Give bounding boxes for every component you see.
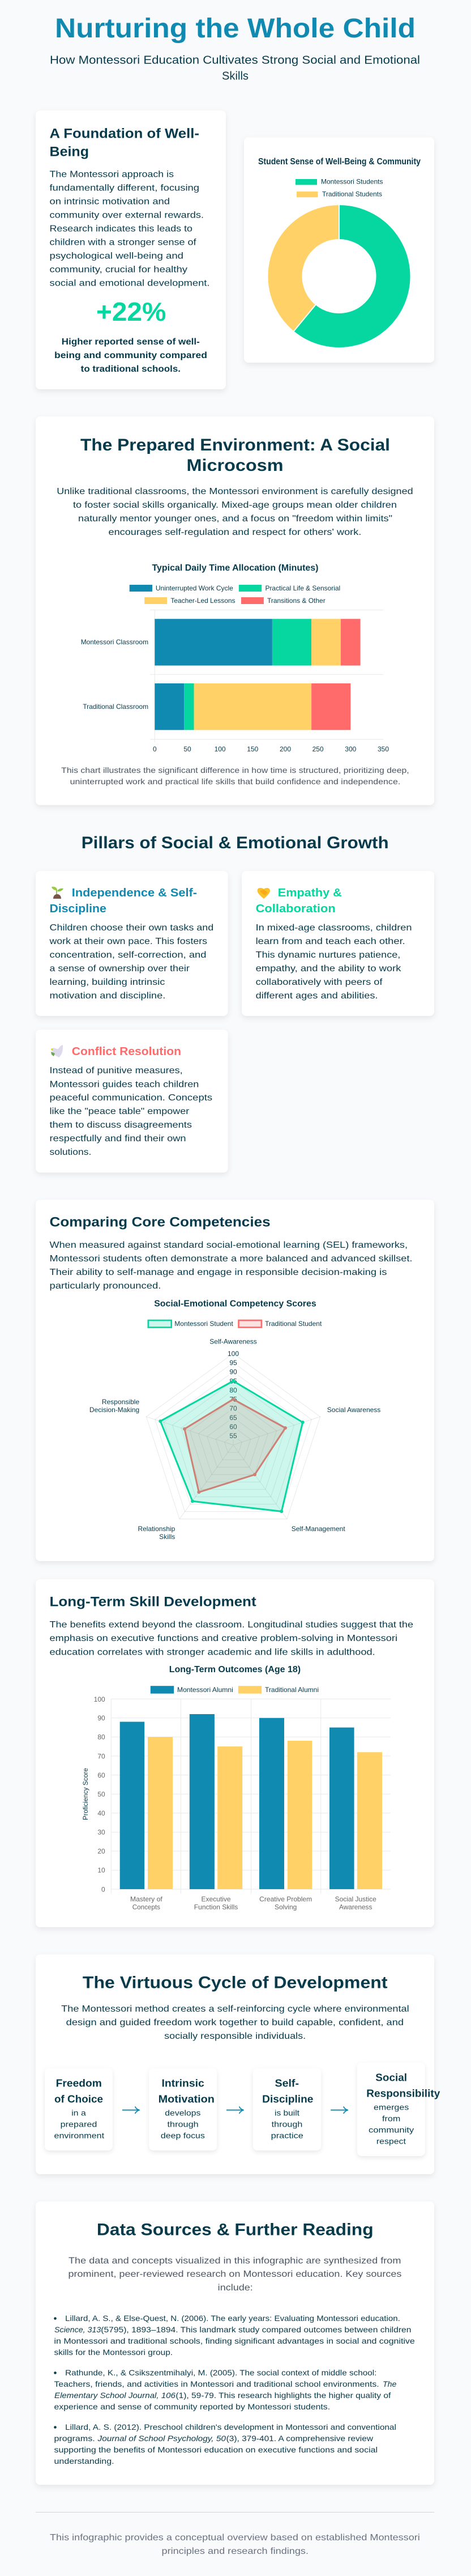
stacked bar chart (81, 610, 389, 753)
source: Lillard and Else-Quest 2006: skills for the Montessori group. (54, 2348, 173, 2357)
text block: competencies (50, 1240, 412, 1291)
text block: sources intro (68, 2256, 401, 2293)
heading: data sources: Data Sources & Further Reading (97, 2221, 374, 2239)
stat caption (54, 337, 207, 374)
heading: conflict resolution: Conflict Resolution (72, 1045, 181, 1058)
panel: empathy and collaboration (242, 871, 434, 1016)
text block: virtuous cycle: The Montessori method creates a self-reinforcing cycle where environmental (61, 2004, 409, 2014)
heading: prepared environment: The Prepared Environment: A Social (80, 436, 390, 454)
footer: This infographic provides a conceptual overview based on established Montessori (50, 2533, 420, 2543)
icon: seedling (52, 887, 63, 899)
stacked bar chart: 100 (215, 745, 226, 753)
legend: Teacher-Led Lessons (170, 597, 236, 605)
text block: foundation paragraph: community over external rewards. (50, 210, 204, 220)
grouped bar chart: 60 (97, 1771, 105, 1779)
text block: empathy (256, 923, 412, 1001)
heading: prepared environment: Microcosm (187, 456, 283, 475)
text block: conflict resolution (50, 1066, 212, 1157)
radar chart: 85 (229, 1377, 237, 1385)
panel: conflict resolution (36, 1030, 228, 1172)
step: intrinsic motivation: Motivation (159, 2094, 215, 2105)
text block: virtuous cycle: design and guided freedom work together to build capable, confident, and (66, 2018, 404, 2027)
header (50, 14, 420, 83)
step: intrinsic motivation: develops (165, 2109, 200, 2118)
step: social responsibility: Social (375, 2072, 407, 2084)
text block: conflict resolution: Montessori guides teach children (50, 1079, 199, 1089)
legend: Practical Life & Sensorial (265, 584, 340, 592)
source: Rathunde and Csikszentmihalyi 2005: Rathunde, K., & Csikszentmihalyi, M. (2005). The social context of middle school: (65, 2368, 376, 2377)
icon: dove (51, 1045, 63, 1057)
stacked bar chart: Traditional Classroom (83, 703, 148, 711)
text block: empathy: This dynamic nurtures patience, (256, 950, 400, 960)
text block: conflict resolution: like the "peace table" empower (50, 1107, 190, 1116)
source: Rathunde and Csikszentmihalyi 2005: experience and sense of community reported by Montessori students. (54, 2402, 330, 2411)
source: Rathunde and Csikszentmihalyi 2005: Elementary School Journal, 106 (54, 2391, 175, 2400)
radar chart: Self-Management (292, 1525, 345, 1533)
source: Lillard and Else-Quest 2006 (54, 2314, 415, 2357)
radar chart (89, 1338, 380, 1541)
stacked bar chart: 0 (153, 745, 157, 753)
grouped bar chart: 90 (97, 1714, 105, 1722)
arrow (122, 2107, 139, 2114)
text block: empathy: different ages and abilities. (256, 991, 378, 1001)
source: Lillard 2012 (54, 2422, 396, 2466)
source: Lillard 2012: programs. (54, 2434, 95, 2443)
source: Rathunde and Csikszentmihalyi 2005: The (383, 2379, 397, 2388)
legend: Traditional Student (265, 1320, 322, 1328)
text block: empathy: In mixed-age classrooms, children (256, 923, 412, 933)
text block: independence (49, 923, 213, 1001)
radar chart: 60 (229, 1423, 237, 1431)
stacked bar chart: 50 (183, 745, 191, 753)
step: intrinsic motivation: deep focus (161, 2131, 205, 2140)
panel: virtuous cycle (36, 1954, 440, 2174)
text block: competencies: particularly pronounced. (50, 1281, 161, 1291)
legend (151, 1686, 319, 1694)
step: social responsibility: community (369, 2126, 414, 2135)
text block: conflict resolution: Instead of punitive measures, (50, 1066, 183, 1076)
source: Lillard and Else-Quest 2006: Lillard, A. S., & Else-Quest, N. (2006). The early years: Evaluating Montessori education. (65, 2314, 400, 2323)
text block: foundation paragraph: social and emotional development. (50, 279, 209, 288)
legend: Montessori Students (321, 178, 383, 186)
heading: prepared environment (80, 436, 390, 475)
panel: comparing core competencies (36, 1200, 434, 1561)
step: self-discipline: Self- (275, 2078, 299, 2089)
text block: long-term: The benefits extend beyond the classroom. Longitudinal studies suggest that the (50, 1620, 413, 1630)
text block: environment paragraph: to foster social skills organically. Mixed-age groups mean older children (73, 500, 397, 510)
chart title: Long-Term Outcomes (Age 18) (169, 1665, 301, 1674)
stat caption: to traditional schools. (81, 364, 181, 374)
grouped bar chart: Executive (202, 1895, 231, 1903)
text block: foundation paragraph: fundamentally different, focusing (50, 184, 199, 193)
text block: foundation paragraph: Research indicates this leads to (50, 224, 192, 233)
text block: environment paragraph: naturally mentor younger ones, and a focus on "freedom within limits" (78, 514, 392, 524)
doughnut chart (267, 205, 410, 348)
stacked bar chart: 150 (247, 745, 259, 753)
legend: Uninterrupted Work Cycle (156, 584, 233, 592)
panel: long-term skill development (36, 1579, 434, 1927)
heading: long-term: Long-Term Skill Development (50, 1595, 256, 1609)
chart title: Typical Daily Time Allocation (Minutes) (152, 563, 318, 573)
radar chart: 90 (229, 1368, 237, 1376)
stacked bar chart: 300 (345, 745, 357, 753)
source: Lillard and Else-Quest 2006: in Montessori and traditional schools, finding significant advantages in social and cognitive (54, 2336, 415, 2345)
source: Lillard 2012: (3), 379-401. A comprehensive review (226, 2434, 374, 2443)
source: Lillard 2012: Lillard, A. S. (2012). Preschool children's development in Montessori and conventional (65, 2422, 396, 2432)
step: freedom of choice: Freedom (56, 2078, 102, 2089)
text block: sources intro: include: (218, 2283, 253, 2293)
step: self-discipline: Discipline (262, 2094, 313, 2105)
source: Lillard 2012: understanding. (54, 2456, 114, 2466)
heading: independence: Discipline (50, 903, 106, 915)
radar chart: 65 (229, 1414, 237, 1422)
text block: independence: Children choose their own tasks and (50, 923, 213, 933)
step: social responsibility (357, 2063, 440, 2156)
text block: foundation paragraph: psychological well-being and (50, 252, 183, 261)
legend: Montessori Alumni (177, 1686, 233, 1694)
text block: conflict resolution: peaceful communication. Concepts (50, 1093, 212, 1103)
heading: empathy: Collaboration (256, 903, 336, 915)
icon: handshake (257, 888, 270, 899)
step: self-discipline: through (272, 2120, 302, 2129)
step: self-discipline (253, 2068, 321, 2150)
heading: foundation: A Foundation of Well- (50, 126, 199, 141)
text block: sources intro: The data and concepts visualized in this infographic are synthesized from (68, 2256, 401, 2265)
stat caption: Higher reported sense of well- (62, 337, 200, 347)
grouped bar chart: Social Justice (335, 1895, 376, 1903)
legend: Traditional Students (322, 190, 382, 198)
panel: a foundation of well-being (36, 110, 226, 389)
step: freedom of choice: in a (71, 2109, 86, 2118)
legend (130, 584, 340, 605)
text block: competencies: Montessori students often demonstrate a more balanced and advanced skillset. (50, 1254, 412, 1264)
radar chart: 100 (228, 1350, 239, 1358)
stacked bar chart: 350 (378, 745, 389, 753)
text block: long-term (50, 1620, 413, 1657)
footer (50, 2533, 420, 2556)
grouped bar chart: Function Skills (194, 1903, 238, 1911)
source: Rathunde and Csikszentmihalyi 2005: (1), 59-79. This research highlights the higher quality of (175, 2391, 391, 2400)
grouped bar chart: Proficiency Score (82, 1768, 89, 1820)
text block: environment paragraph (57, 487, 413, 537)
step: intrinsic motivation: through (168, 2120, 199, 2129)
text block: conflict resolution: respectfully and find their own (50, 1134, 186, 1144)
grouped bar chart: Awareness (339, 1903, 372, 1911)
stat caption: being and community compared (54, 351, 207, 360)
text block: foundation paragraph: children with a stronger sense of (50, 238, 196, 248)
source: Lillard and Else-Quest 2006: (5795), 1893–1894. This landmark study compared outcomes between children (101, 2325, 411, 2334)
text block: empathy: collaboratively with peers of (256, 977, 383, 987)
text block: independence: concentration, self-correction, and (50, 950, 206, 960)
text block: environment paragraph: encourages self-regulation and respect for others' work. (109, 528, 361, 537)
step: freedom of choice: of Choice (54, 2094, 103, 2105)
radar chart: 95 (229, 1359, 237, 1367)
heading: independence (50, 887, 197, 915)
grouped bar chart: 40 (97, 1809, 105, 1817)
heading: competencies: Comparing Core Competencies (50, 1215, 271, 1230)
text block: long-term: emphasis on executive functions and creative problem-solving in Montessori (50, 1634, 397, 1643)
panel: independence and self-discipline (36, 871, 228, 1016)
legend: Transitions & Other (267, 597, 326, 605)
chart title: Student Sense of Well-Being & Community (258, 157, 421, 167)
text block: conflict resolution: solutions. (50, 1147, 91, 1157)
heading: empathy (256, 887, 342, 915)
radar chart: Skills (159, 1533, 175, 1541)
grouped bar chart: 0 (101, 1885, 105, 1893)
panel: data sources (36, 2201, 434, 2485)
grouped bar chart: 70 (97, 1752, 105, 1760)
heading: empathy: Empathy & (278, 887, 342, 899)
radar chart: 80 (229, 1386, 237, 1394)
legend: Traditional Alumni (265, 1686, 319, 1694)
step: freedom of choice: prepared (61, 2120, 97, 2129)
text block: competencies: Their ability to self-manage and engage in responsible decision-making is (50, 1268, 387, 1277)
panel: prepared environment (36, 416, 434, 805)
grouped bar chart: Concepts (132, 1903, 160, 1911)
legend: Montessori Student (174, 1320, 233, 1328)
legend (148, 1320, 322, 1328)
text block: independence: motivation and discipline. (50, 991, 165, 1001)
chart caption: uninterrupted work and practical life skills that build confidence and independence. (70, 777, 400, 786)
text block: empathy: empathy, and the ability to work (256, 964, 402, 974)
grouped bar chart (82, 1695, 391, 1911)
text block: environment paragraph: Unlike traditional classrooms, the Montessori environment is carefully designed (57, 487, 413, 496)
stacked bar chart: 250 (312, 745, 324, 753)
radar chart: 75 (229, 1396, 237, 1404)
step: freedom of choice (45, 2068, 113, 2150)
chart caption: This chart illustrates the significant difference in how time is structured, prioritizing deep, (61, 766, 409, 775)
radar chart: Decision-Making (89, 1406, 139, 1414)
subtitle: Skills (222, 70, 249, 83)
step: social responsibility: respect (376, 2137, 406, 2146)
radar chart: Relationship (138, 1525, 175, 1533)
arrow (331, 2107, 348, 2114)
arrow (226, 2107, 243, 2114)
text block: conflict resolution: them to discuss disagreements (50, 1120, 192, 1130)
stacked bar chart: 200 (280, 745, 291, 753)
chart title: Social-Emotional Competency Scores (154, 1299, 316, 1308)
subtitle (50, 54, 420, 83)
text block: virtuous cycle (61, 2004, 409, 2041)
text block: independence: learning, building intrinsic (50, 977, 165, 987)
text block: foundation paragraph: on intrinsic motivation and (50, 197, 170, 206)
grouped bar chart: Solving (275, 1903, 297, 1911)
radar chart: Social Awareness (327, 1406, 380, 1414)
text block: virtuous cycle: socially responsible individuals. (164, 2031, 306, 2041)
legend (296, 178, 383, 198)
text block: independence: work at their own pace. This fosters (49, 937, 207, 946)
title: Nurturing the Whole Child (55, 14, 416, 44)
source: Lillard 2012: supporting the benefits of Montessori education on executive functions and social (54, 2445, 378, 2454)
text block: long-term: education correlates with stronger academic and life skills in adulthood. (50, 1647, 375, 1657)
heading: foundation: Being (50, 144, 89, 159)
grouped bar chart: 50 (97, 1791, 105, 1799)
grouped bar chart: 10 (97, 1867, 105, 1874)
radar chart: Self-Awareness (209, 1338, 257, 1346)
text block: foundation paragraph (50, 170, 209, 288)
text block: foundation paragraph: community, crucial for healthy (50, 265, 187, 274)
text block: independence: a sense of ownership over their (50, 964, 190, 974)
step: intrinsic motivation (149, 2068, 217, 2150)
grouped bar chart: 100 (94, 1695, 105, 1703)
step: intrinsic motivation: Intrinsic (162, 2078, 204, 2089)
panel: doughnut chart (244, 137, 434, 363)
text block: competencies: When measured against standard social-emotional learning (SEL) frameworks, (50, 1240, 408, 1250)
text block: foundation paragraph: The Montessori approach is (50, 170, 174, 179)
chart caption (61, 766, 409, 786)
grouped bar chart: 30 (97, 1829, 105, 1837)
grouped bar chart: Creative Problem (259, 1895, 312, 1903)
radar chart: 70 (229, 1405, 237, 1413)
grouped bar chart: Mastery of (130, 1895, 162, 1903)
radar chart: Responsible (102, 1398, 140, 1406)
step: social responsibility: from (382, 2114, 400, 2123)
heading: independence: Independence & Self- (72, 887, 197, 899)
step: social responsibility: Responsibility (366, 2088, 440, 2099)
heading: pillars: Pillars of Social & Emotional Growth (82, 834, 389, 852)
stacked bar chart: Montessori Classroom (81, 638, 148, 646)
heading: foundation (50, 126, 199, 159)
grouped bar chart: 20 (97, 1847, 105, 1855)
step: social responsibility: emerges (374, 2103, 409, 2112)
footer: principles and research findings. (162, 2547, 309, 2556)
grouped bar chart: 80 (97, 1733, 105, 1741)
stat: +22%: +22% (96, 297, 166, 326)
source: Rathunde and Csikszentmihalyi 2005: Teachers, friends, and activities in Montessori and traditional school environments. (54, 2379, 379, 2388)
source: Rathunde and Csikszentmihalyi 2005 (54, 2368, 397, 2411)
step: freedom of choice: environment (54, 2131, 104, 2140)
heading: virtuous cycle: The Virtuous Cycle of Development (83, 1973, 387, 1992)
radar chart: 55 (229, 1432, 237, 1440)
step: self-discipline: practice (271, 2131, 303, 2140)
text block: empathy: learn from and teach each other. (256, 937, 405, 946)
step: self-discipline: is built (275, 2109, 299, 2118)
text block: sources intro: prominent, peer-reviewed research on Montessori education. Key sources (68, 2269, 401, 2279)
source: Lillard and Else-Quest 2006: Science, 313 (54, 2325, 101, 2334)
subtitle: How Montessori Education Cultivates Strong Social and Emotional (50, 54, 420, 67)
source: Lillard 2012: Journal of School Psychology, 50 (97, 2434, 226, 2443)
